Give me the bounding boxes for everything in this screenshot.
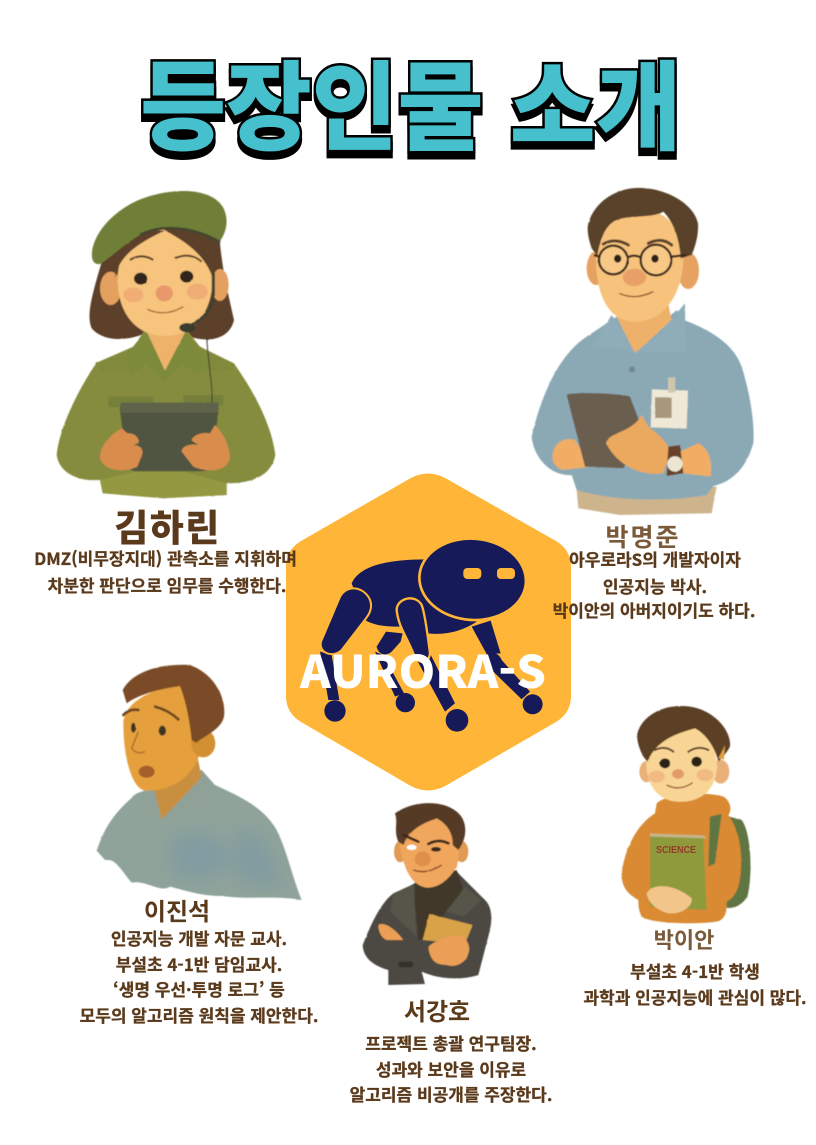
description: 김하린: [34, 545, 297, 597]
book label: SCIENCE: SCIENCE: [656, 845, 696, 856]
name: 서강호: 서강호: [404, 992, 470, 1027]
character: 이진석 illustration: [97, 665, 302, 900]
description: 이진석: 모두의 알고리즘 원칙을 제안한다.: [80, 1002, 318, 1027]
description: 박명준: [553, 546, 755, 622]
description: 서강호: [350, 1030, 552, 1106]
robot mascot: [320, 535, 543, 732]
description: 서강호: 성과와 보안을 이유로: [376, 1056, 526, 1081]
character: 박이안 illustration: [622, 706, 751, 923]
description: 이진석: ‘생명 우선·투명 로그’ 등: [113, 976, 285, 1001]
character: 박명준 illustration: [532, 188, 754, 515]
description: 박이안: 부설초 4-1반 학생: [630, 958, 760, 983]
name: 박이안: 박이안: [654, 923, 714, 955]
description: 서강호: 알고리즘 비공개를 주장한다.: [350, 1081, 552, 1106]
description: 이진석: 부설초 4-1반 담임교사.: [116, 951, 282, 976]
name: 김하린: 김하린: [114, 498, 221, 552]
hexagon badge: [286, 474, 571, 790]
label: AURORA-S: AURORA-S: [299, 636, 546, 701]
name: 박명준: 박명준: [605, 518, 681, 554]
logo: AURORA-S hexagon: [286, 474, 571, 790]
description: 김하린: 차분한 판단으로 임무를 수행한다.: [48, 572, 286, 597]
description: 박명준: 박이안의 아버지이기도 하다.: [553, 597, 755, 622]
title: 등장인물 소개: [140, 30, 682, 170]
name: 이진석: 이진석: [144, 892, 210, 927]
description: 김하린: DMZ(비무장지대) 관측소를 지휘하며: [34, 545, 297, 570]
character: 김하린 illustration: [57, 191, 275, 498]
description: 이진석: 인공지능 개발 자문 교사.: [111, 925, 287, 950]
description: 박이안: 과학과 인공지능에 관심이 많다.: [583, 984, 807, 1009]
description: 박명준: 인공지능 박사.: [603, 573, 707, 598]
description: 박명준: 아우로라S의 개발자이자: [569, 546, 741, 571]
description: 박이안: [583, 958, 807, 1009]
description: 이진석: [80, 925, 318, 1027]
description: 서강호: 프로젝트 총괄 연구팀장.: [365, 1030, 537, 1055]
character: 서강호 illustration: [363, 803, 491, 985]
